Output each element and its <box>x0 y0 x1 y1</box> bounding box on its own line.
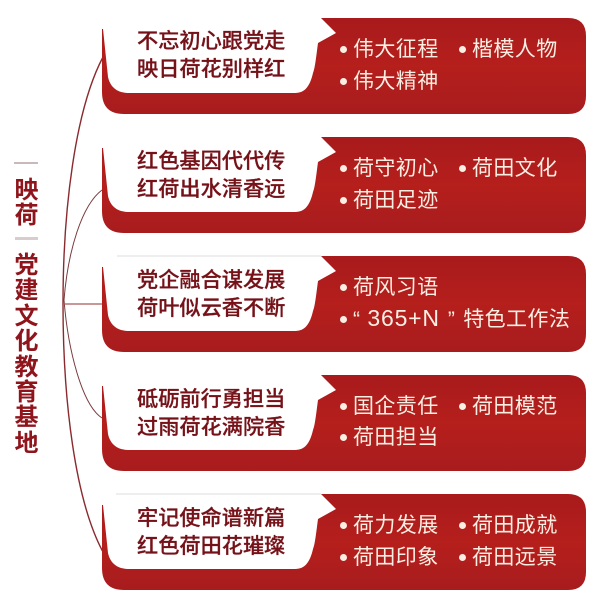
slogan: 映日荷花别样红 <box>137 58 285 81</box>
slogan <box>137 506 285 558</box>
slogan <box>137 30 285 81</box>
heading: 党建文化教育基地: 化 <box>14 328 38 355</box>
slogan: 党企融合谋发展 <box>137 269 285 292</box>
panel: 牢记使命: 荷田成就 <box>472 514 558 537</box>
heading: 映荷 <box>14 177 38 229</box>
panel: 党企融合 <box>102 256 586 352</box>
slogan <box>137 388 285 439</box>
slogan: 红色荷田花璀璨 <box>137 535 285 558</box>
heading: 党建文化教育基地: 育 <box>14 379 38 406</box>
slogan <box>137 150 285 201</box>
slogan <box>137 268 285 320</box>
slogan: 牢记使命谱新篇 <box>137 507 285 530</box>
panel: 不忘初心 <box>102 18 586 114</box>
side title: 映荷党建文化教育基地 <box>14 162 38 457</box>
panel: 砥砺前行: 荷田模范 <box>472 395 558 418</box>
panel: 砥砺前行 <box>102 375 586 471</box>
panel: 牢记使命: 荷田远景 <box>472 546 558 569</box>
panel: 党企融合: “ 365+N ” 特色工作法 <box>353 305 570 331</box>
panel: 砥砺前行: 荷田担当 <box>353 426 439 449</box>
decorative bracket top <box>14 162 38 164</box>
heading: 映荷: 映 <box>14 177 38 204</box>
decorative bracket bottom <box>15 237 38 240</box>
slogan: 红色基因代代传 <box>137 150 285 173</box>
heading: 党建文化教育基地: 文 <box>14 303 38 330</box>
panel: 红色基因 <box>102 137 586 233</box>
panel: 红色基因: 荷田足迹 <box>353 189 439 212</box>
slogan: 砥砺前行勇担当 <box>137 388 285 411</box>
panel: 牢记使命: 荷田印象 <box>353 546 439 569</box>
list items: 荷力发展 <box>353 514 439 537</box>
heading: 映荷: 荷 <box>14 202 38 229</box>
list items: 荷守初心 <box>353 157 439 180</box>
slogan: 过雨荷花满院香 <box>137 416 285 439</box>
slogan: 荷叶似云香不断 <box>137 297 285 320</box>
panel: 不忘初心: 楷模人物 <box>472 38 558 61</box>
panel: 不忘初心: 伟大精神 <box>353 70 439 93</box>
heading: 党建文化教育基地: 地 <box>14 430 38 457</box>
heading: 党建文化教育基地: 建 <box>14 277 38 304</box>
heading: 党建文化教育基地 <box>14 252 38 457</box>
list items: 荷风习语 <box>353 276 439 299</box>
heading: 党建文化教育基地: 基 <box>14 404 38 431</box>
heading: 党建文化教育基地: 党 <box>14 252 38 279</box>
list items: 伟大征程 <box>353 38 439 61</box>
list items: 国企责任 <box>353 395 439 418</box>
slogan: 红荷出水清香远 <box>137 178 285 201</box>
panel: 红色基因: 荷田文化 <box>472 157 558 180</box>
connector lines <box>62 58 102 552</box>
heading: 党建文化教育基地: 教 <box>14 354 38 381</box>
slogan: 不忘初心跟党走 <box>137 30 285 53</box>
panel: 牢记使命 <box>102 494 586 590</box>
